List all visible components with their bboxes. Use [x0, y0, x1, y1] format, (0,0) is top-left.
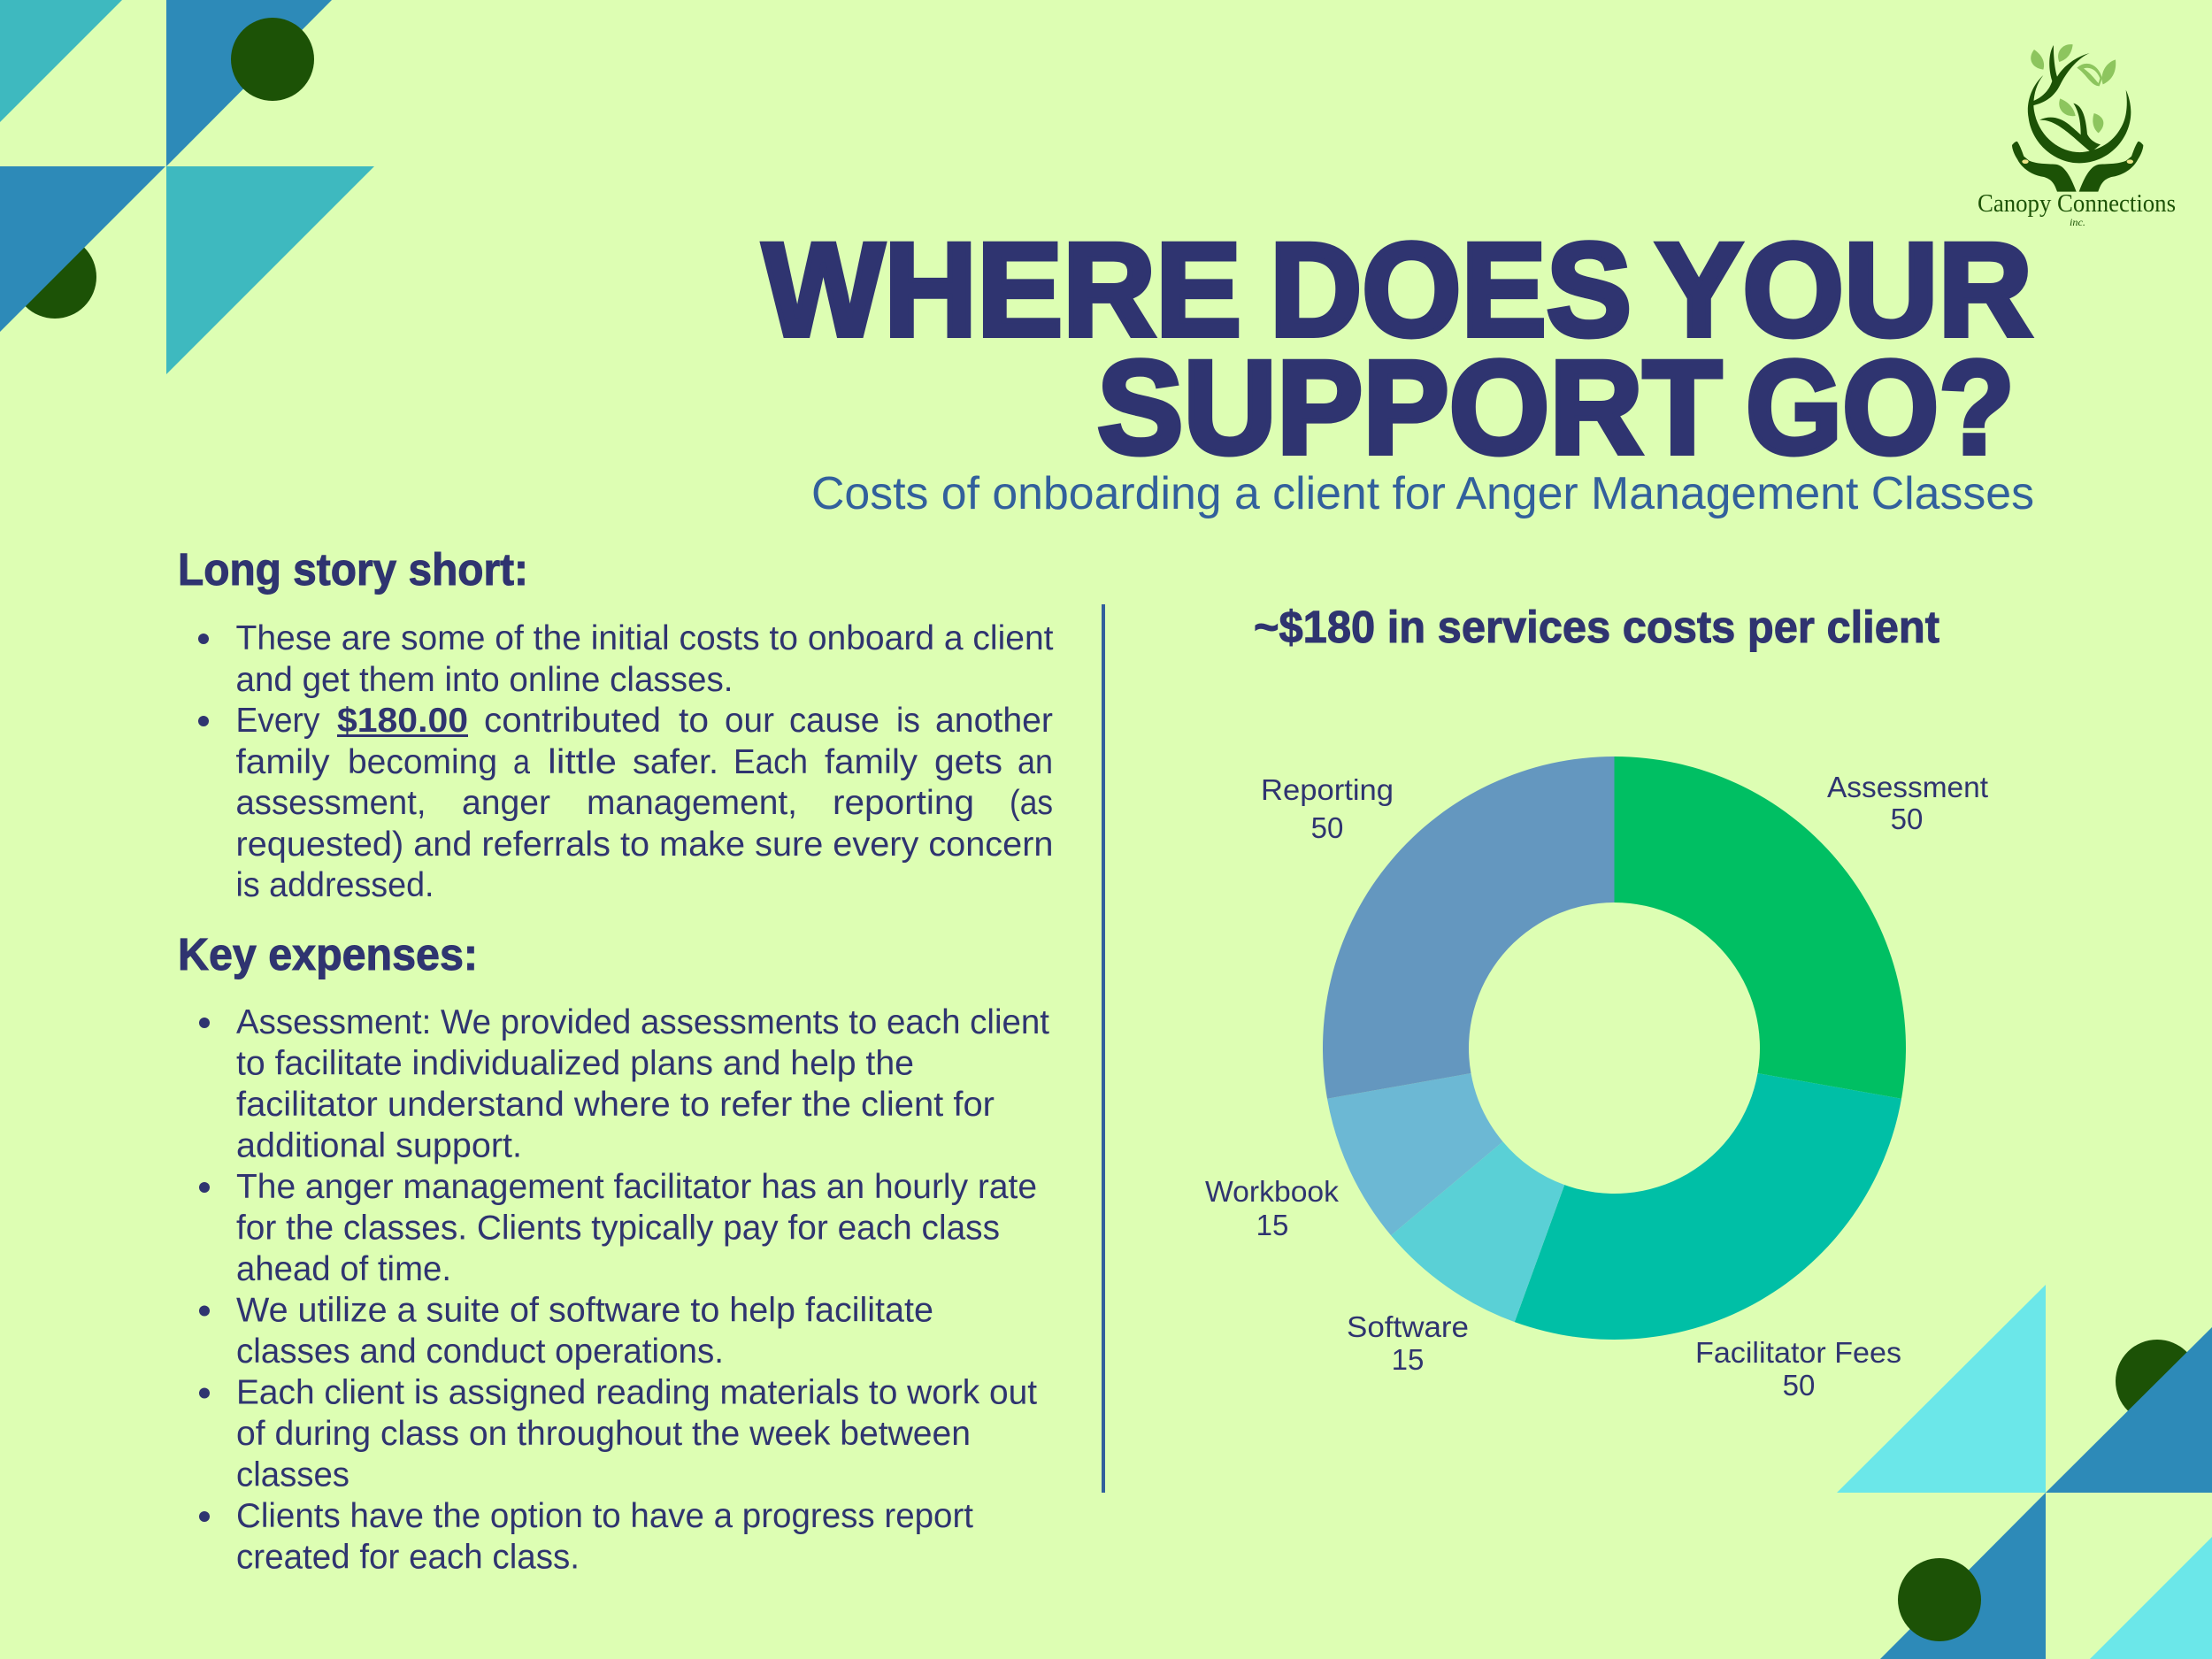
bullet list: summary: requested) and referrals to make sure every concern	[235, 826, 1053, 864]
bullet list: summary: $180.00	[337, 702, 468, 740]
bullet list: summary: These are some of the initial costs to onboard a client	[235, 619, 1054, 657]
segment: workbook	[1327, 1073, 1502, 1235]
bullet list: summary: another	[935, 702, 1053, 740]
bullet list: expenses	[199, 1003, 1049, 1577]
bullet list: summary: gets	[934, 743, 1002, 781]
bullet list: summary: assessment,	[235, 784, 426, 822]
label: reporting: Reporting	[1261, 773, 1394, 806]
bullet list: expenses: ahead of time.	[236, 1250, 451, 1288]
bullet list: summary: and get them into online classes.	[235, 661, 733, 699]
vertical column rule	[1102, 604, 1105, 1493]
label: workbook: Workbook	[1205, 1175, 1340, 1208]
label: reporting: 50	[1311, 811, 1343, 844]
icon: left hand	[2012, 142, 2077, 192]
title: YOUR	[1655, 215, 2032, 364]
label: software: 15	[1392, 1343, 1424, 1376]
bullet list: summary: is addressed.	[235, 866, 434, 904]
label: software	[1347, 1310, 1469, 1376]
icon: right hand	[2079, 142, 2143, 192]
bullet list: expenses: We utilize a suite of software to help facilitate	[236, 1292, 933, 1329]
segment: assessment	[1614, 757, 1906, 1099]
bullet list: summary: family	[235, 743, 330, 781]
panel: long story short	[178, 544, 1054, 904]
bullet list: summary: little	[548, 743, 617, 781]
bullet list: summary: reporting	[833, 784, 974, 822]
heading: key expenses: Key expenses:	[178, 929, 478, 979]
icon: tree in cupped hands	[2012, 44, 2143, 192]
label: workbook: 15	[1256, 1209, 1288, 1241]
bullet list: summary: a	[513, 743, 530, 781]
bullet list: expenses: for the classes. Clients typically pay for each class	[236, 1209, 1000, 1248]
bullet list: expenses: additional support.	[236, 1127, 522, 1164]
title: SUPPORT	[1097, 333, 1722, 481]
bullet list: summary: family	[825, 743, 918, 781]
label: workbook	[1205, 1175, 1340, 1241]
segment: reporting	[1323, 757, 1614, 1099]
bullet list: summary	[198, 619, 1054, 904]
bullet list: summary: Each	[733, 743, 808, 781]
label: assessment: 50	[1891, 803, 1923, 835]
bullet list: expenses: classes	[236, 1456, 349, 1494]
bullet list: summary: is	[896, 702, 920, 740]
bullet list: expenses: created for each class.	[236, 1538, 580, 1577]
chart heading: ~$180 in services costs per client	[1254, 602, 1939, 652]
title: GO?	[1746, 333, 2015, 481]
label: facilitator fees: Facilitator Fees	[1695, 1336, 1901, 1369]
title: DOES	[1270, 215, 1632, 364]
label: software: Software	[1347, 1310, 1469, 1343]
bullet list: expenses: to facilitate individualized plans and help the	[236, 1044, 914, 1083]
label: assessment	[1827, 771, 1988, 835]
bullet list: summary: safer.	[633, 743, 718, 781]
bullet list: summary: an	[1018, 743, 1053, 781]
bullet list: summary: cause	[789, 702, 879, 740]
bullet list: expenses: Clients have the option to have a progress report	[236, 1497, 973, 1535]
label: facilitator fees	[1695, 1336, 1901, 1402]
subtitle: Costs of onboarding a client for Anger Management Classes	[811, 468, 2034, 519]
bullet list: summary: to	[679, 702, 709, 740]
bullet list: summary: our	[725, 702, 774, 740]
bullet list: expenses: of during class on throughout the week between	[236, 1415, 971, 1453]
logo suffix: inc.	[2070, 216, 2085, 228]
segment: software	[1391, 1141, 1564, 1322]
bullet list: summary: management,	[587, 784, 797, 822]
bullet list: expenses: Assessment: We provided assessments to each client	[236, 1003, 1049, 1041]
bullet list: summary: anger	[462, 784, 550, 822]
bullet list: expenses: classes and conduct operations.	[236, 1333, 724, 1371]
logo: Canopy Connections	[1978, 44, 2176, 228]
donut chart: service costs	[1323, 757, 1906, 1340]
bullet list: summary: contributed	[484, 702, 661, 740]
segment: facilitator fees	[1515, 1073, 1901, 1340]
label: facilitator fees: 50	[1783, 1369, 1815, 1402]
bullet list: summary: becoming	[348, 743, 497, 781]
title	[763, 215, 2032, 481]
logo wordmark: Canopy Connections	[1978, 189, 2176, 218]
decoration: bottom-right geometric shapes	[1837, 1285, 2212, 1659]
title: WHERE	[763, 215, 1241, 364]
bullet list: summary: Every	[235, 702, 320, 740]
bullet list: summary: (as	[1010, 784, 1053, 822]
bullet list: expenses: The anger management facilitator has an hourly rate	[236, 1168, 1037, 1206]
bullet list: expenses: Each client is assigned reading materials to work out	[236, 1373, 1037, 1412]
label: assessment: Assessment	[1827, 771, 1988, 803]
label: reporting	[1261, 773, 1394, 844]
panel: key expenses	[178, 929, 1049, 1577]
bullet list: expenses: facilitator understand where to refer the client for	[236, 1086, 995, 1124]
decoration: top-left geometric shapes	[0, 0, 374, 374]
heading: long story short: Long story short:	[178, 544, 528, 595]
